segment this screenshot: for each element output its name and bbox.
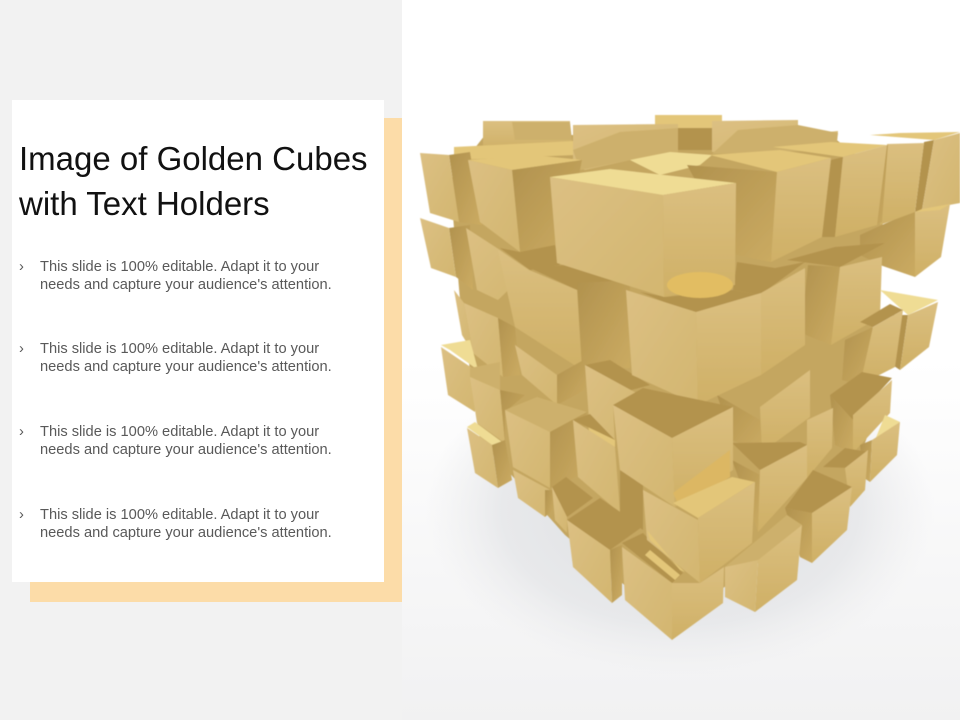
- bullet 4: ›: [19, 507, 24, 523]
- bullet 3: ›: [19, 424, 24, 440]
- title: Image of Golden Cubes: [19, 140, 368, 177]
- bullet 2: needs and capture your audience's attention.: [40, 359, 332, 375]
- golden cubes image: [402, 114, 960, 720]
- bullet 2: ›: [19, 341, 24, 357]
- right mid cube: [733, 243, 885, 375]
- bullet 1: This slide is 100% editable. Adapt it to your: [40, 259, 319, 275]
- core of cube stack: [450, 135, 890, 625]
- front middle cube: [626, 290, 761, 405]
- bullet 4: needs and capture your audience's attention.: [40, 525, 332, 541]
- bullet 1: [19, 259, 332, 293]
- title: [19, 140, 368, 222]
- right upper cubes: [687, 142, 887, 262]
- upper middle-left cubes: [454, 228, 560, 377]
- title: with Text Holders: [19, 185, 270, 222]
- bullet 4: [19, 507, 332, 541]
- bullet 3: [19, 424, 332, 458]
- lower-left back cubes: [441, 340, 587, 517]
- bottom-left cube: [567, 498, 642, 603]
- bullet 2: [19, 341, 332, 375]
- bullet 1: ›: [19, 259, 24, 275]
- right side lower cubes: [823, 290, 938, 507]
- large top front cube: [550, 169, 760, 315]
- bottom front cube: [622, 533, 724, 640]
- central left large cube: [498, 250, 630, 370]
- beige accent panel: [30, 118, 402, 602]
- bullet 3: This slide is 100% editable. Adapt it to your: [40, 424, 319, 440]
- gold cube at center front: [613, 388, 733, 507]
- left top cubes: [420, 152, 582, 290]
- bullet 4: This slide is 100% editable. Adapt it to your: [40, 507, 319, 523]
- lower right cubes: [725, 470, 852, 612]
- right lower-center cubes: [717, 370, 833, 532]
- lower-middle cubes: [552, 360, 650, 533]
- bullet 2: This slide is 100% editable. Adapt it to your: [40, 341, 319, 357]
- bullet 1: needs and capture your audience's attention.: [40, 277, 332, 293]
- floor shadow: [425, 345, 935, 675]
- bullet 3: needs and capture your audience's attention.: [40, 442, 332, 458]
- rightmost top cubes: [860, 132, 960, 277]
- front lower cube: [643, 477, 755, 583]
- white text panel: [12, 100, 384, 582]
- back cubes on top row: [454, 115, 838, 175]
- left grey background: [0, 0, 402, 720]
